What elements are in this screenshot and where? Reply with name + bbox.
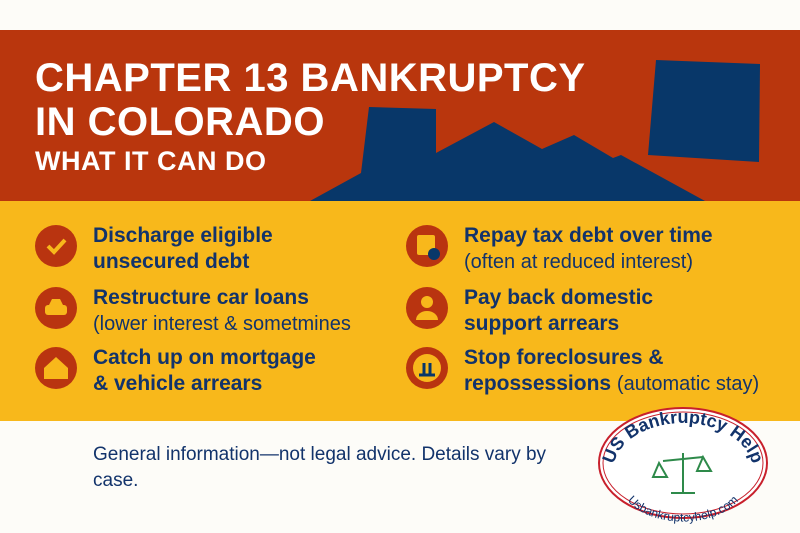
subtitle: WHAT IT CAN DO: [35, 146, 266, 176]
item: tax: [406, 224, 713, 273]
logo: [598, 407, 768, 524]
item: discharge: unsecured debt: [93, 250, 249, 273]
disclaimer: General information—not legal advice. Details vary by case.: [93, 444, 546, 491]
item: discharge: Discharge eligible: [93, 224, 273, 247]
title: [35, 56, 586, 144]
logo: US Bankruptcy Help: [602, 412, 760, 462]
title: IN COLORADO: [35, 100, 325, 144]
item: tax: Repay tax debt over time: [464, 224, 713, 247]
title: CHAPTER 13 BANKRUPTCY: [35, 56, 586, 100]
item: mortgage: [35, 346, 316, 395]
item: car loans: (lower interest & sometmines: [93, 313, 351, 335]
item: support: [406, 286, 653, 335]
item: mortgage: & vehicle arrears: [93, 372, 262, 395]
item: foreclosures: [406, 346, 759, 395]
logo: Usbankruptcyhelp.com: [629, 495, 738, 524]
item: support: Pay back domestic: [464, 286, 653, 309]
yellow panel: [0, 201, 800, 421]
header band: [0, 30, 800, 201]
item: foreclosures: repossessions (automatic stay): [464, 372, 759, 395]
item: support: support arrears: [464, 312, 619, 335]
item: discharge: [35, 224, 273, 273]
item: mortgage: Catch up on mortgage: [93, 346, 316, 369]
mountains and colorado shape: [310, 60, 760, 201]
item: foreclosures: Stop foreclosures &: [464, 346, 664, 369]
item: tax: (often at reduced interest): [464, 251, 693, 273]
item: car loans: [35, 286, 351, 335]
item: car loans: Restructure car loans: [93, 286, 309, 309]
